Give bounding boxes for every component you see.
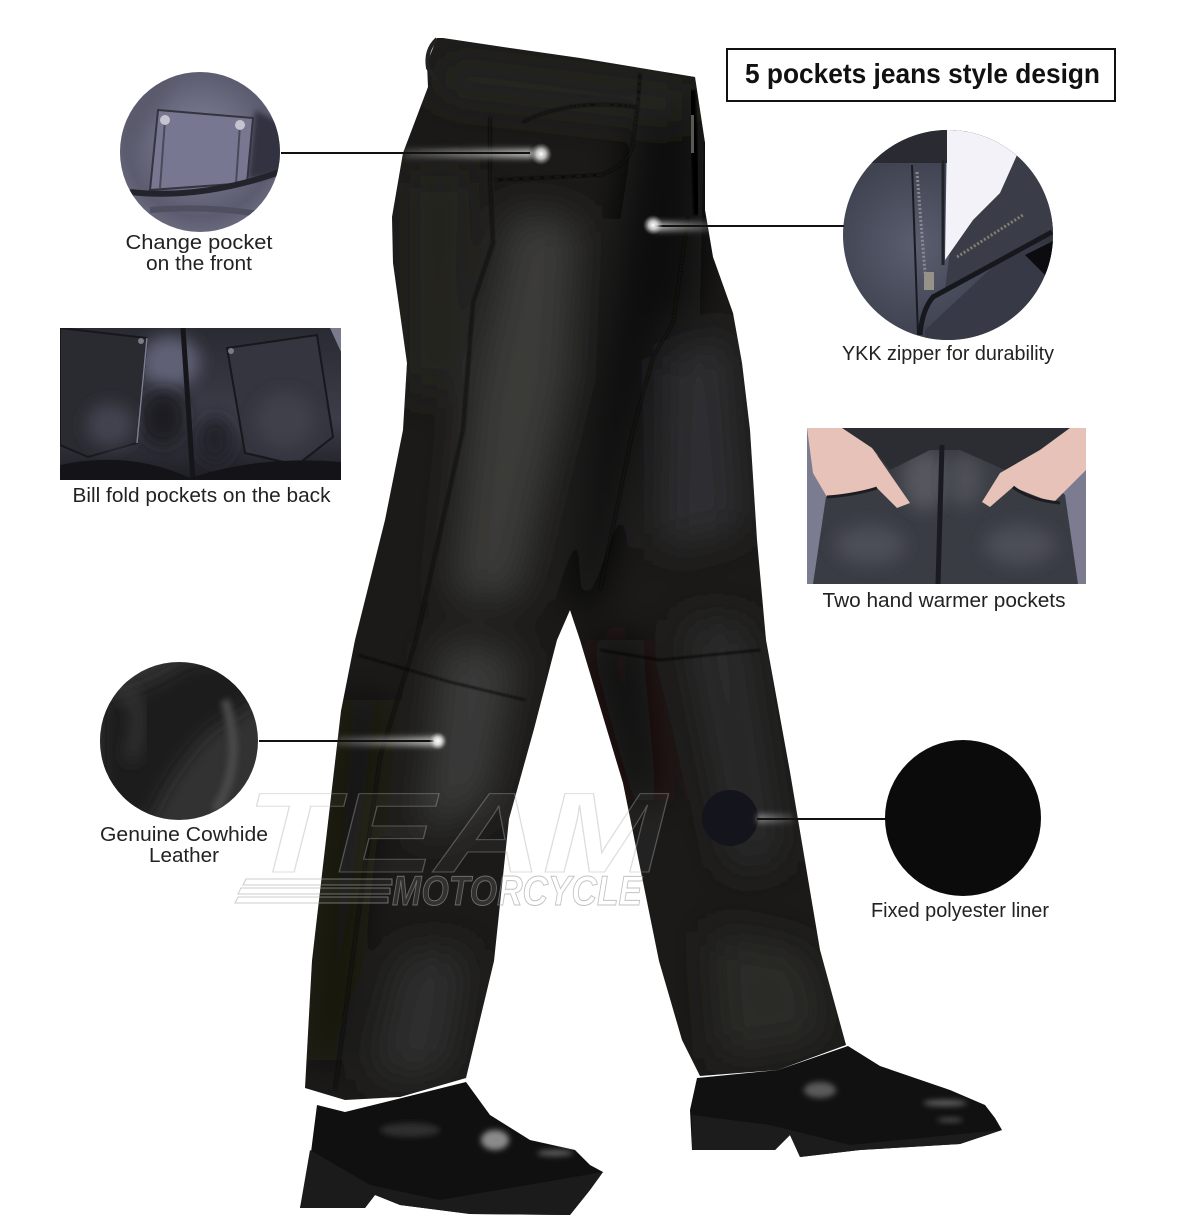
- watermark: Team Motorcycle: TEAM: [246, 770, 669, 897]
- leader line: [655, 225, 844, 227]
- marker: [530, 143, 552, 165]
- callout: change pocket: [120, 72, 552, 275]
- image: liner texture: [885, 740, 1041, 896]
- marker glow: [337, 737, 441, 746]
- label: Genuine Cowhide: [100, 824, 268, 846]
- label: YKK zipper for durability: [842, 343, 1054, 365]
- callout: genuine cowhide: [100, 662, 447, 867]
- title box: [727, 49, 1115, 101]
- side seam and knee seam: [335, 117, 493, 1090]
- image: hands in pockets: [807, 428, 1086, 584]
- leader line: [281, 152, 530, 154]
- zipper pull: [691, 115, 694, 153]
- callout: hand warmer pockets: [807, 428, 1086, 612]
- image: front change pocket: [120, 72, 285, 232]
- callout: bill fold pockets: [60, 328, 341, 507]
- callout: genuine cowhide: Leather: [149, 845, 219, 867]
- label: Fixed polyester liner: [871, 900, 1049, 922]
- marker: [643, 215, 663, 235]
- callout: polyester liner: [702, 740, 1049, 922]
- marker glow: [655, 222, 710, 231]
- product photo: leather pants: [305, 38, 846, 1100]
- belt loop: [427, 39, 437, 80]
- leader line: [757, 818, 886, 820]
- callout: YKK zipper: [643, 130, 1055, 365]
- image: small liner swatch: [702, 790, 758, 846]
- marker glow: [757, 814, 793, 823]
- leader line: [259, 740, 434, 742]
- marker: [429, 732, 447, 750]
- title box: 5 pockets jeans style design: [745, 58, 1100, 89]
- leather shading: [315, 55, 830, 1090]
- callout: change pocket: on the front: [146, 253, 252, 275]
- label: Change pocket: [126, 232, 273, 254]
- image: zipper closeup: [843, 130, 1055, 340]
- marker glow: [403, 149, 533, 158]
- trousers silhouette: [305, 38, 846, 1100]
- watermark: Team Motorcycle: MOTORCYCLE: [392, 867, 644, 914]
- image: leather texture: [100, 662, 258, 820]
- label: Bill fold pockets on the back: [72, 485, 332, 507]
- icon: rear boot: [690, 1046, 1002, 1157]
- icon: front boot: [300, 1082, 603, 1215]
- label: Two hand warmer pockets: [822, 590, 1066, 612]
- watermark: Team Motorcycle: [235, 770, 669, 914]
- pocket and fly seams: [495, 73, 688, 590]
- image: back pockets: [60, 328, 341, 480]
